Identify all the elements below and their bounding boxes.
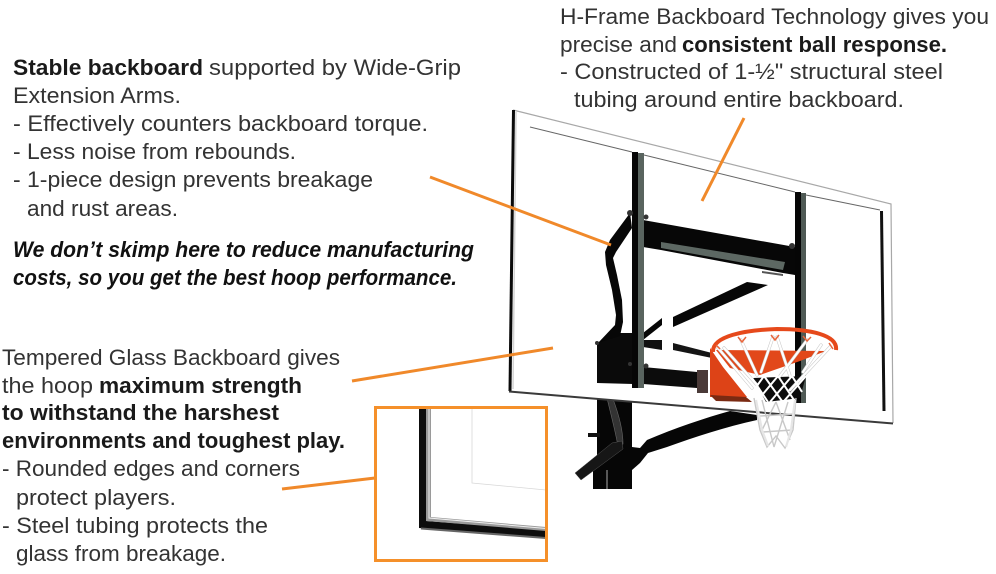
arrow: to H-frame — [702, 118, 744, 201]
rim net hooks — [716, 335, 833, 349]
callout: stable backboard text: and rust areas. — [27, 196, 178, 221]
lower struts — [643, 340, 712, 393]
mounting bolts — [595, 210, 795, 368]
arrow: to inset — [282, 478, 375, 489]
mounting bracket — [597, 333, 633, 384]
callout: stable backboard text: We don’t skimp here to reduce manufacturing — [13, 237, 475, 262]
callout: H-frame technology text — [560, 4, 989, 112]
callout: tempered glass text — [2, 345, 345, 566]
S-shaped extension arm — [598, 213, 632, 343]
pole and support arm — [575, 396, 757, 489]
lower net — [754, 398, 796, 448]
cross arm between uprights — [643, 220, 795, 276]
left upright — [632, 152, 644, 388]
basketball hoop product illustration — [509, 110, 893, 489]
callout: tempered glass text: - Rounded edges and corners — [2, 456, 300, 481]
basketball rim — [713, 329, 836, 352]
callout: stable backboard text — [13, 55, 475, 290]
callout: stable backboard text: - Effectively counters backboard torque. — [13, 111, 428, 136]
inset: corner detail — [376, 408, 546, 560]
callout: stable backboard text: supported by Wide-Grip — [209, 55, 461, 80]
callout: tempered glass text: environments and toughest play. — [2, 428, 345, 453]
net dark opening — [753, 376, 806, 402]
right upright — [795, 192, 806, 403]
callout: stable backboard text: - 1-piece design prevents breakage — [13, 167, 373, 192]
callout: H-frame technology text: tubing around entire backboard. — [574, 87, 904, 112]
callout: stable backboard text: costs, so you get the best hoop performance. — [13, 265, 457, 290]
diagonal brace behind shooter square — [643, 282, 768, 340]
net upper strands — [718, 337, 830, 390]
callout: H-frame technology text: precise and — [560, 32, 677, 57]
arrow: to extension arm — [430, 177, 611, 245]
callout: stable backboard text: Stable backboard — [13, 55, 203, 80]
callout: tempered glass text: glass from breakage. — [16, 541, 226, 566]
callout: tempered glass text: Tempered Glass Backboard gives — [2, 345, 340, 370]
callout: stable backboard text: Extension Arms. — [13, 83, 181, 108]
callout: H-frame technology text: H-Frame Backboard Technology gives you — [560, 4, 989, 29]
arrow: to glass — [352, 348, 553, 381]
callout: stable backboard text: - Less noise from rebounds. — [13, 139, 296, 164]
callout: tempered glass text: - Steel tubing protects the — [2, 513, 268, 538]
net mesh over opening — [752, 376, 806, 402]
callout: H-frame technology text: - Constructed of 1-½" structural steel — [560, 59, 943, 84]
backboard white face and frame — [509, 110, 893, 424]
callout: tempered glass text: to withstand the harshest — [2, 400, 280, 425]
callout: H-frame technology text: consistent ball response. — [682, 32, 947, 57]
callout: tempered glass text: maximum strength — [99, 373, 302, 398]
callout: tempered glass text: protect players. — [16, 485, 176, 510]
orange rim mount — [710, 348, 826, 402]
callout: tempered glass text: the hoop — [2, 373, 93, 398]
net upper strands shadow — [718, 337, 830, 390]
